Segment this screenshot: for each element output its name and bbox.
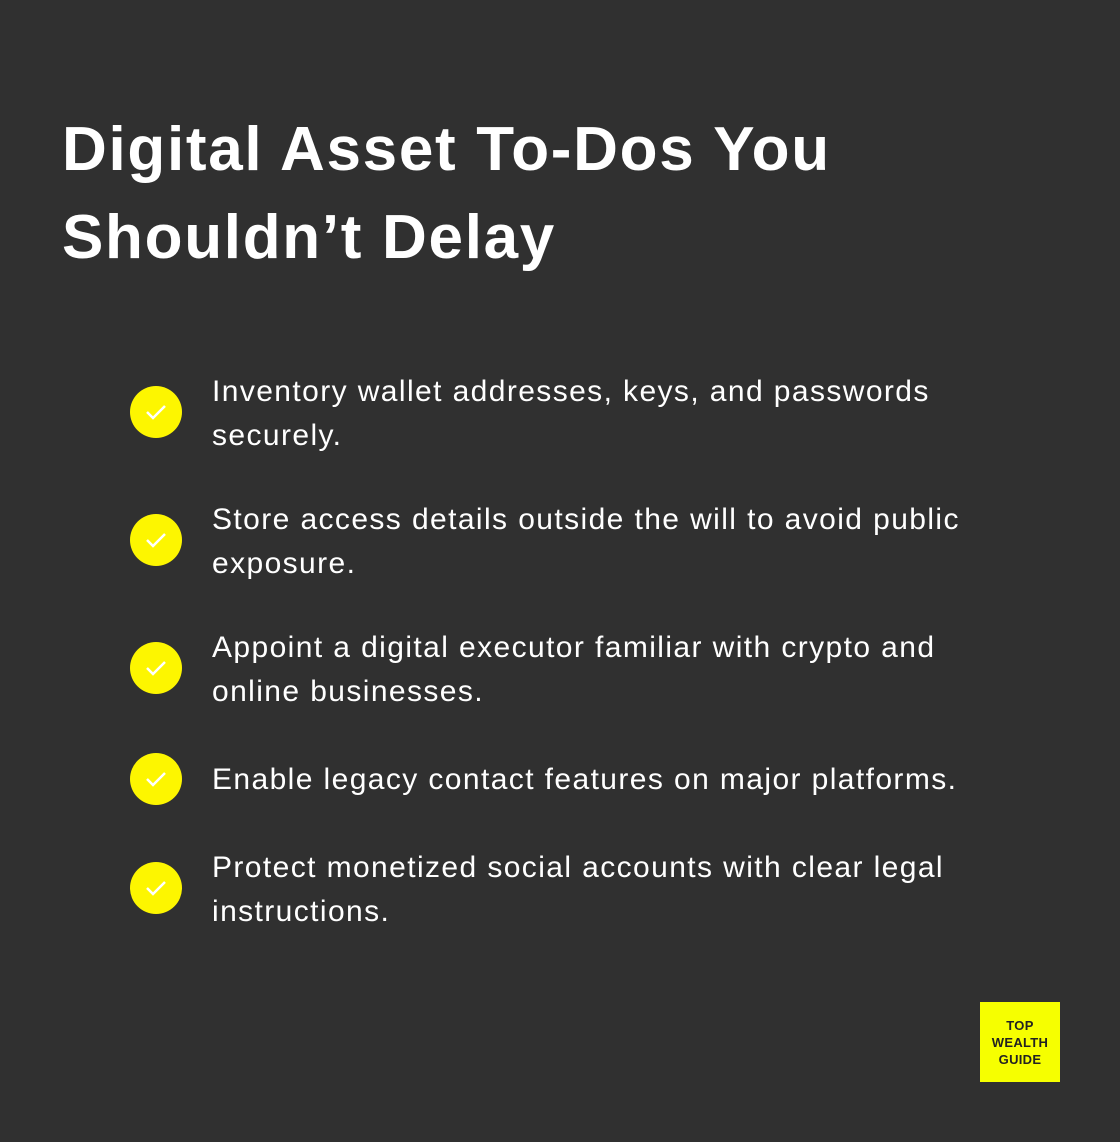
title — [62, 115, 831, 272]
text: instructions. — [212, 895, 390, 928]
logo — [980, 1002, 1060, 1082]
icon: check — [130, 514, 182, 566]
item 2 — [130, 503, 960, 580]
text — [212, 631, 935, 708]
title: Digital Asset To-Dos You — [62, 115, 831, 184]
item 3 — [130, 631, 935, 708]
title: Shouldn’t Delay — [62, 203, 556, 272]
text: exposure. — [212, 547, 356, 580]
text — [212, 851, 944, 928]
icon: check — [130, 386, 182, 438]
text: Enable legacy contact features on major platforms. — [212, 763, 957, 796]
text: Appoint a digital executor familiar with crypto and — [212, 631, 935, 664]
text: Store access details outside the will to avoid public — [212, 503, 960, 536]
logo: GUIDE — [999, 1052, 1041, 1067]
item 4 — [130, 753, 957, 805]
text: Inventory wallet addresses, keys, and passwords — [212, 375, 930, 408]
icon: check — [130, 642, 182, 694]
text: online businesses. — [212, 675, 484, 708]
item 5 — [130, 851, 944, 928]
logo: TOP — [1006, 1018, 1034, 1033]
text: Protect monetized social accounts with clear legal — [212, 851, 944, 884]
item 1 — [130, 375, 930, 452]
text — [212, 503, 960, 580]
logo: WEALTH — [992, 1035, 1048, 1050]
icon: check — [130, 753, 182, 805]
text — [212, 375, 930, 452]
icon: check — [130, 862, 182, 914]
text: securely. — [212, 419, 342, 452]
